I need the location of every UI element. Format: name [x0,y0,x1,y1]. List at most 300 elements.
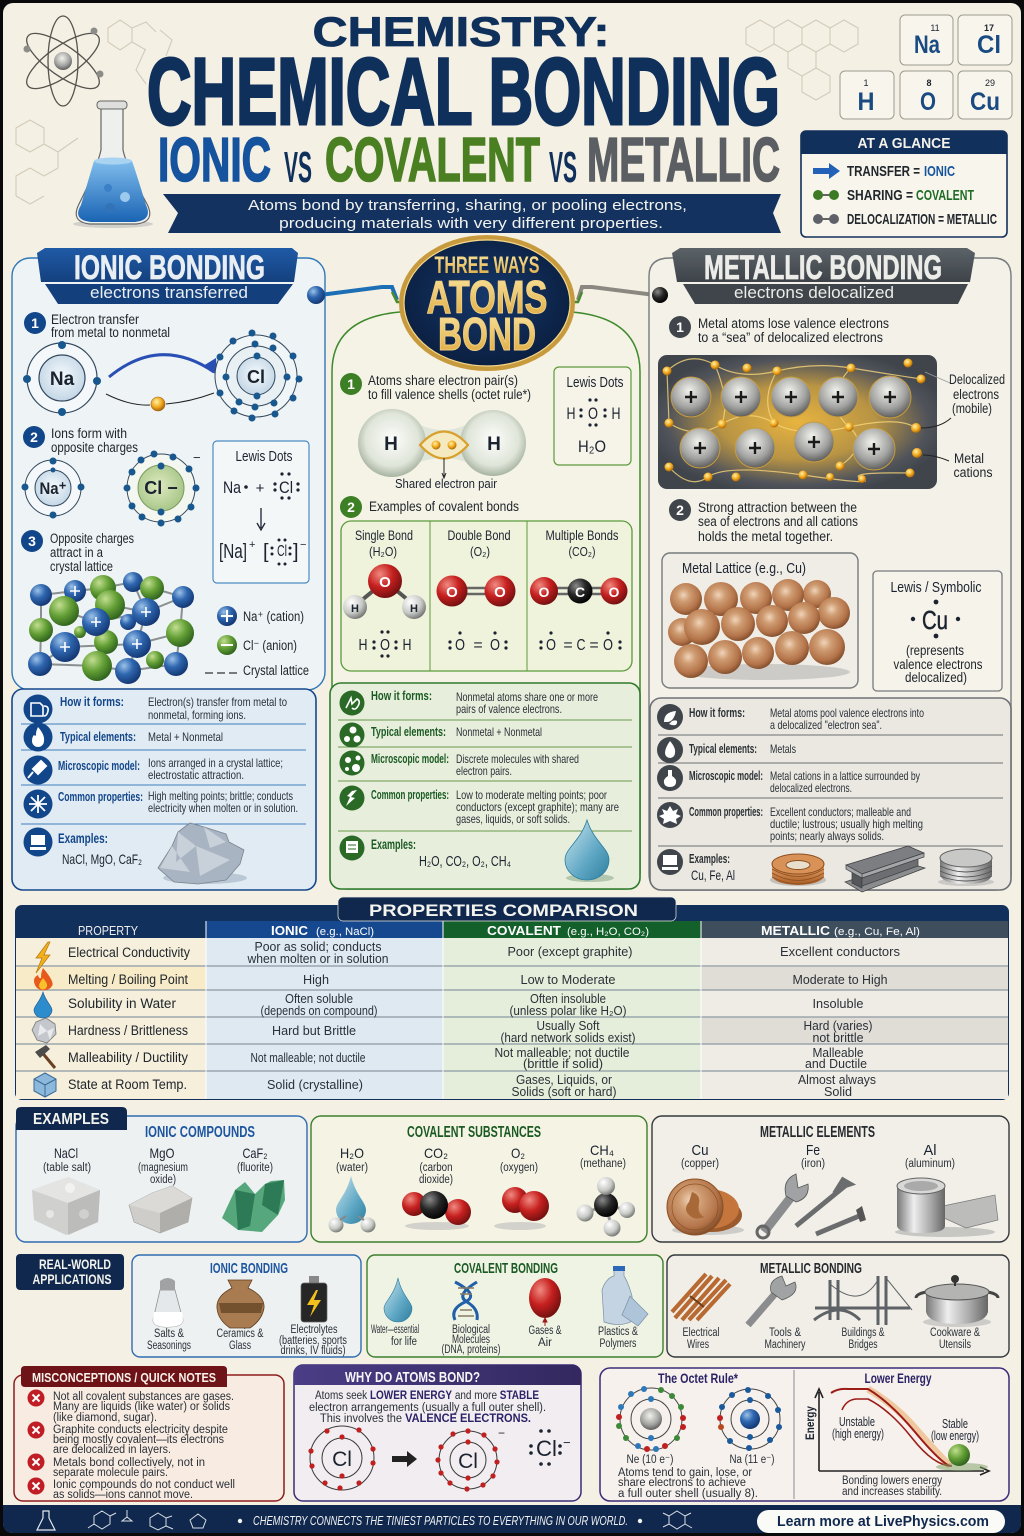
intro banner: producing materials with very different properties. [279,215,663,232]
intro banner [163,194,781,233]
row: examples: Cu, Fe, Al [691,867,735,883]
row: microscopic model [340,750,579,778]
row: common properties: points; nearly always solids. [770,829,884,843]
row: how it forms: Metal atoms pool valence electrons into [770,706,924,720]
lewis dots box: [Na] [219,541,247,563]
callouts: delocalized electrons and cations: electrons [953,387,999,402]
column headers: COVALENT [487,924,561,938]
item: carbon dioxide [402,1145,471,1230]
row: malleability: Not malleable; not ductile [250,1050,366,1065]
single bond [343,527,426,658]
lewis dots box: Cl [279,478,293,497]
row: microscopic model: Ions arranged in a crystal lattice; [148,756,283,770]
icon: molecule [663,1511,692,1529]
tile: hydrogen: 1 [863,78,869,88]
atom: chloride ion [124,450,201,526]
item: nacl: (table salt) [43,1162,91,1174]
double bond [436,527,516,654]
row: common properties: conductors (except graphite); many are [456,800,619,814]
row: electrical conductivity: Poor (except graphite) [508,944,632,959]
row: common properties: High melting points; brittle; conducts [148,789,293,803]
chart: lower energy: Energy [803,1406,817,1440]
section title [338,897,676,921]
icon: copper coil [770,854,826,886]
row: electrical conductivity: Poor as solid; conducts [254,940,382,954]
atom: chloride ion: Cl − [144,478,178,498]
row: typical elements: Typical elements: [371,724,446,739]
panel: ionic facts [12,689,316,890]
item: salts: Salts & [154,1328,184,1340]
tile: oxygen: O [920,88,936,116]
row: examples: Examples: [689,851,730,866]
panel: covalent bonding [330,235,640,889]
multiple bonds: O [609,584,620,600]
row: microscopic model: Microscopic model: [689,768,763,783]
electron sea diagram [658,355,937,489]
tile: copper [958,71,1012,119]
panel: covalent substances: COVALENT SUBSTANCES [407,1124,541,1141]
tile: copper: Cu [970,88,1000,116]
link: learn more: Learn more at LivePhysics.com [777,1513,989,1530]
subtitle: ionic vs covalent vs metallic [158,126,780,195]
atom: chlorine after: − [498,1426,505,1440]
octet explanation text: share electrons to achieve [618,1477,746,1489]
h2 molecule: shared electron pair: H [487,434,501,455]
panel: properties comparison [15,897,1009,1100]
icon: water drop [565,820,614,882]
item: methane [576,1142,635,1236]
row: typical elements [24,722,223,752]
tile: sodium: Na [914,31,941,59]
step 1 text: to fill valence shells (octet rule*) [368,387,531,402]
item: ceramics [216,1280,264,1352]
octet rule: Ne (10 e⁻) [626,1454,674,1466]
row: typical elements [657,737,796,763]
lewis dots box: [ [263,541,269,563]
note 2 [28,1422,228,1456]
row: malleability: Malleability / Ductility [68,1050,188,1065]
panel: ionic applications: IONIC BONDING [210,1260,288,1277]
title block [147,8,780,195]
multiple bonds: C [576,637,586,654]
multiple bonds: = [589,637,599,654]
item: aluminium [895,1142,998,1237]
step 3 text: Opposite charges [50,531,134,546]
subtitle: ionic vs covalent vs metallic: COVALENT [325,126,540,195]
row: how it forms: Nonmetal atoms share one or more [456,690,598,704]
row: examples: Examples: [58,830,108,846]
item: mgo: oxide) [150,1174,176,1186]
atom: chlorine after: Cl [458,1450,478,1473]
note 1: Many are liquids (like water) or solids [53,1401,230,1413]
row: electrical conductivity: when molten or in solution [247,952,389,966]
intro banner: Atoms bond by transferring, sharing, or pooling electrons, [248,197,687,214]
item: biological molecules: Molecules [452,1334,490,1346]
chart: lower energy: (low energy) [931,1429,979,1443]
double bond: = [473,637,483,654]
step 2 text: 2 [676,502,684,518]
single bond: O [379,574,391,591]
step 2 text [23,426,138,455]
row: how it forms: a delocalized "electron sea". [770,718,882,732]
row: examples [340,836,511,870]
step 3 text [21,530,134,574]
row: hardness: Hard but Brittle [272,1023,356,1038]
step 1 text: Metal atoms lose valence electrons [698,316,889,331]
item: buildings: Bridges [848,1339,878,1351]
row: malleability: and Ductile [805,1057,867,1071]
row: solubility: Often soluble [285,992,353,1006]
row: melting point: Low to Moderate [520,972,616,987]
row: microscopic model: Microscopic model: [58,758,140,773]
row: common properties [24,789,298,818]
item: cookware: Cookware & [930,1327,980,1339]
item: electrolytes: (batteries, sports [279,1335,347,1347]
step 1 text [669,316,889,345]
row: common properties: ductile; lustrous; usually high melting [770,817,923,831]
row: common properties: Excellent conductors; malleable and [770,805,911,819]
row: typical elements: Metal + Nonmetal [148,730,223,744]
item: plastics: Plastics & [598,1326,638,1338]
item: caf2: CaF₂ [242,1145,268,1161]
row: microscopic model [24,756,283,784]
row: typical elements [340,722,542,748]
panel: ionic compounds: IONIC COMPOUNDS [145,1124,255,1141]
applications tab [16,1254,124,1290]
note 3: Metals bond collectively, not in [53,1457,205,1469]
item: wires: Wires [687,1339,709,1351]
row: state at room temperature: Solid [824,1085,852,1099]
note 2: Graphite conducts electricity despite [53,1424,228,1436]
applications tab: APPLICATIONS [32,1271,112,1287]
row: examples: H₂O, CO₂, O₂, CH₄ [419,854,511,870]
explanation text: This involves the VALENCE ELECTRONS. [320,1413,531,1425]
lewis symbolic box: Cu [922,605,948,635]
row: melting point: Moderate to High [792,972,888,987]
arrow: electron transfer [106,355,217,411]
tile: sodium: 11 [930,23,940,33]
single bond: H [410,603,418,615]
metal lattice box: Metal Lattice (e.g., Cu) [682,561,806,577]
note 3 [28,1454,205,1479]
tile: chlorine: Cl [977,31,1001,59]
note 4 [28,1478,235,1501]
multiple bonds: (CO₂) [568,544,596,559]
lewis dots box: Na [223,478,241,497]
chart: lower energy: (high energy) [832,1427,884,1441]
panel: misconceptions [14,1366,284,1501]
icon: steel i-beam [845,846,925,892]
row: state at room temperature: Solids (soft or hard) [512,1085,616,1099]
atom: sodium [717,1387,782,1451]
item: gases [528,1278,562,1349]
step 3 text: 3 [28,533,36,549]
subtitle: ionic vs covalent vs metallic: IONIC [158,126,271,195]
lewis symbolic box: valence electrons [894,657,983,672]
lattice legend: Cl⁻ (anion) [243,638,297,653]
connectors to medallion [307,286,668,304]
item: carbon dioxide: CO₂ [424,1145,448,1161]
atom: sodium ion [22,458,84,518]
footer: CHEMISTRY CONNECTS THE TINIEST PARTICLES TO EVERYTHING IN OUR WORLD. [253,1513,628,1528]
step 2 text: 2 [30,429,38,445]
row: common properties: Common properties: [689,804,763,819]
row: examples: Examples: [371,836,416,852]
tile: oxygen: 8 [926,78,932,88]
atom: chlorine before: Cl [332,1448,352,1471]
icon: flask [37,1511,55,1530]
item: biological molecules: (DNA, proteins) [442,1344,501,1356]
item: carbon dioxide: dioxide) [419,1174,453,1186]
lewis dots box: + [249,539,255,551]
panel: at a glance: AT A GLANCE [858,136,951,152]
row: common properties: Common properties: [58,789,143,804]
lewis symbolic box: Lewis / Symbolic [890,580,982,596]
row: how it forms: How it forms: [371,688,432,703]
icon: salt rock [158,823,247,884]
tile: chlorine [958,15,1012,65]
item: cookware [916,1275,998,1351]
callouts: delocalized electrons and cations: cations [954,465,993,480]
footer [3,1505,1021,1533]
bond types table [341,521,632,671]
double bond: O [455,637,465,654]
row: examples: NaCl, MgO, CaF₂ [62,851,142,867]
h2 molecule: shared electron pair [358,409,526,491]
multiple bonds: O [603,637,613,654]
atom: sodium ion: Na⁺ [40,479,67,498]
item: water: (water) [336,1162,368,1174]
ribbon: ionic bonding [37,248,298,304]
multiple bonds: Multiple Bonds [546,527,618,543]
icon: transfer arrow [813,163,840,179]
row: electrical conductivity: Excellent conductors [780,944,900,959]
step 2 text: 2 [347,499,355,515]
item: iron [757,1142,866,1238]
row: hardness: Usually Soft [536,1019,600,1033]
panel: covalent substances [311,1116,647,1242]
item: copper: Cu [692,1142,708,1159]
item: salts: Seasonings [147,1340,191,1352]
lewis dots box: Lewis Dots [236,449,292,465]
link: learn more [757,1510,1005,1533]
lewis dots box: ] [293,541,299,563]
medallion: three ways atoms bond: THREE WAYS [434,252,540,279]
row: microscopic model: Discrete molecules with shared [456,752,579,766]
lattice legend: Crystal lattice [243,663,309,678]
row: how it forms: How it forms: [60,694,124,709]
item: buildings [814,1276,912,1351]
double bond: O [490,637,500,654]
misconceptions header: MISCONCEPTIONS / QUICK NOTES [32,1371,216,1385]
step 2 text [340,496,519,518]
row: state at room temperature: State at Room Temp. [68,1077,187,1092]
lattice legend [205,606,309,678]
item: salts [147,1278,191,1352]
row: typical elements: Metals [770,742,796,756]
item: nacl [32,1145,100,1235]
panel: why do atoms bond: WHY DO ATOMS BOND? [345,1369,480,1386]
explanation text [309,1390,546,1425]
icons: molecules [88,1510,206,1530]
row: how it forms [340,688,598,716]
item: iron: Fe [806,1142,820,1159]
multiple bonds: O [546,637,556,654]
item: methane: (methane) [580,1158,626,1170]
chart: lower energy: Bonding lowers energy [842,1475,942,1487]
row: microscopic model: electron pairs. [456,764,512,778]
crystal lattice [28,572,194,684]
row: common properties: electricity when molten or in solution. [148,801,298,815]
row: how it forms: How it forms: [689,705,745,720]
lewis dots box [554,367,631,465]
row: common properties: Common properties: [371,787,449,802]
section: real-world applications [16,1254,1009,1357]
item: nacl: NaCl [54,1145,78,1161]
subtitle: ionic vs covalent vs metallic: VS [549,143,577,192]
step 2 text: sea of electrons and all cations [698,514,858,529]
row: electrical conductivity [36,940,900,973]
row: common properties [657,802,923,843]
item: water [371,1278,419,1348]
panel: metallic facts [650,698,1011,892]
item: gases: Gases & [528,1325,562,1337]
panel: covalent applications: COVALENT BONDING [454,1260,558,1277]
note 1 [28,1390,234,1424]
double bond: O [446,584,458,601]
atom: neon [616,1386,686,1452]
single bond: (H₂O) [369,544,397,559]
step 2 text [669,499,858,544]
row: solubility: (depends on compound) [260,1004,378,1018]
tile: copper: 29 [985,78,995,88]
row: microscopic model [657,765,920,795]
row: common properties: gases, liquids, or soft solids. [456,812,570,826]
row: how it forms [24,694,287,724]
single bond: O [380,637,390,654]
subtitle: ionic vs covalent vs metallic: METALLIC [587,126,780,195]
panel: at a glance: TRANSFER = [847,163,920,180]
tile: chlorine: 17 [984,23,994,33]
medallion: three ways atoms bond: ATOMS [426,271,548,323]
lewis dots box: O [588,404,598,423]
panel: ionic compounds [16,1107,307,1242]
explanation text: Atoms seek LOWER ENERGY and more STABLE [315,1390,539,1402]
row: malleability: (brittle if solid) [523,1057,603,1071]
item: wires: Electrical [682,1327,720,1339]
row: state at room temperature [34,1073,876,1099]
row: examples [24,828,142,867]
octet rule: Na (11 e⁻) [730,1454,775,1466]
item: copper: (copper) [681,1158,719,1170]
item: water: H₂O [340,1145,364,1161]
callouts: delocalized electrons and cations: (mobile) [952,401,992,416]
ribbon: metallic bonding [672,248,975,304]
octet rule [616,1370,782,1500]
single bond: H [402,637,412,654]
item: tools: Machinery [764,1339,806,1351]
lewis: chloride: Cl [536,1436,557,1461]
item: biological molecules [442,1282,501,1356]
double bond: Double Bond [448,527,510,543]
item: oxygen: (oxygen) [500,1162,538,1174]
item: plastics: Polymers [600,1338,637,1350]
panel: at a glance: IONIC [924,163,955,180]
atom: chlorine before [308,1426,376,1491]
item: caf2: (fluorite) [237,1162,273,1174]
step 1 text: 1 [31,315,39,331]
step 2 text: Ions form with [51,426,127,441]
atom: chlorine after [435,1426,505,1492]
row: examples [657,849,735,883]
chart: lower energy: Stable [942,1417,968,1431]
row: melting point [34,968,888,990]
lewis dots box: + [256,480,265,497]
item: aluminium: (aluminum) [905,1158,955,1170]
section: examples [16,1107,1009,1242]
panel: why do atoms bond [294,1365,581,1501]
item: biological molecules: Biological [452,1324,490,1336]
row: hardness [32,1018,872,1045]
row: how it forms: Electron(s) transfer from metal to [148,695,287,709]
note 3: separate molecule pairs. [53,1467,168,1479]
item: electrolytes: Electrolytes [290,1324,338,1336]
row: malleability [35,1045,867,1071]
note 4: as solids—ions cannot move. [53,1489,193,1501]
multiple bonds [530,527,628,654]
step 1 text: to a “sea” of delocalized electrons [698,330,883,345]
tile: hydrogen: H [858,88,874,116]
octet explanation text: Atoms tend to gain, lose, or [618,1467,752,1479]
multiple bonds: C [575,584,585,600]
single bond: Single Bond [355,527,413,543]
note 4: Ionic compounds do not conduct well [53,1479,235,1491]
row: solubility: Insoluble [812,996,864,1011]
row: microscopic model: Microscopic model: [371,751,449,766]
column headers: (e.g., Cu, Fe, Al) [834,926,920,938]
item: plastics [598,1266,648,1350]
item: oxygen [494,1145,549,1230]
step 2 text: opposite charges [51,440,138,455]
atom: chlorine [215,330,302,422]
step 3 text: attract in a [50,545,103,560]
row: melting point: High [303,972,329,987]
callouts: delocalized electrons and cations: Delocalized [949,372,1005,387]
icon: sharing [813,190,839,200]
row: solubility: Solubility in Water [68,996,176,1011]
lewis symbolic box [873,571,1002,691]
lewis dots box: H [612,404,620,423]
column headers: (e.g., NaCl) [316,926,374,938]
ribbon: metallic bonding: electrons delocalized [734,284,894,302]
note 1: (like diamond, sugar). [53,1412,157,1424]
single bond: H [351,603,359,615]
ribbon: ionic bonding: IONIC BONDING [74,249,265,287]
row: malleability: Not malleable; not ductile [494,1046,630,1060]
row: state at room temperature: Solid (crystalline) [267,1077,363,1092]
lewis dots box: H₂O [578,437,606,456]
item: methane: CH₄ [590,1142,614,1158]
step 1 text: 1 [676,319,684,335]
tile: hydrogen [840,71,894,119]
lewis dots box: H [566,404,576,423]
row: microscopic model: delocalized electrons. [770,781,852,795]
column headers: IONIC [271,924,308,938]
subtitle: ionic vs covalent vs metallic: VS [284,143,312,192]
chart: lower energy: and increases stability. [842,1486,942,1498]
lewis symbolic box: delocalized) [905,670,967,685]
panel: at a glance [801,131,1007,237]
